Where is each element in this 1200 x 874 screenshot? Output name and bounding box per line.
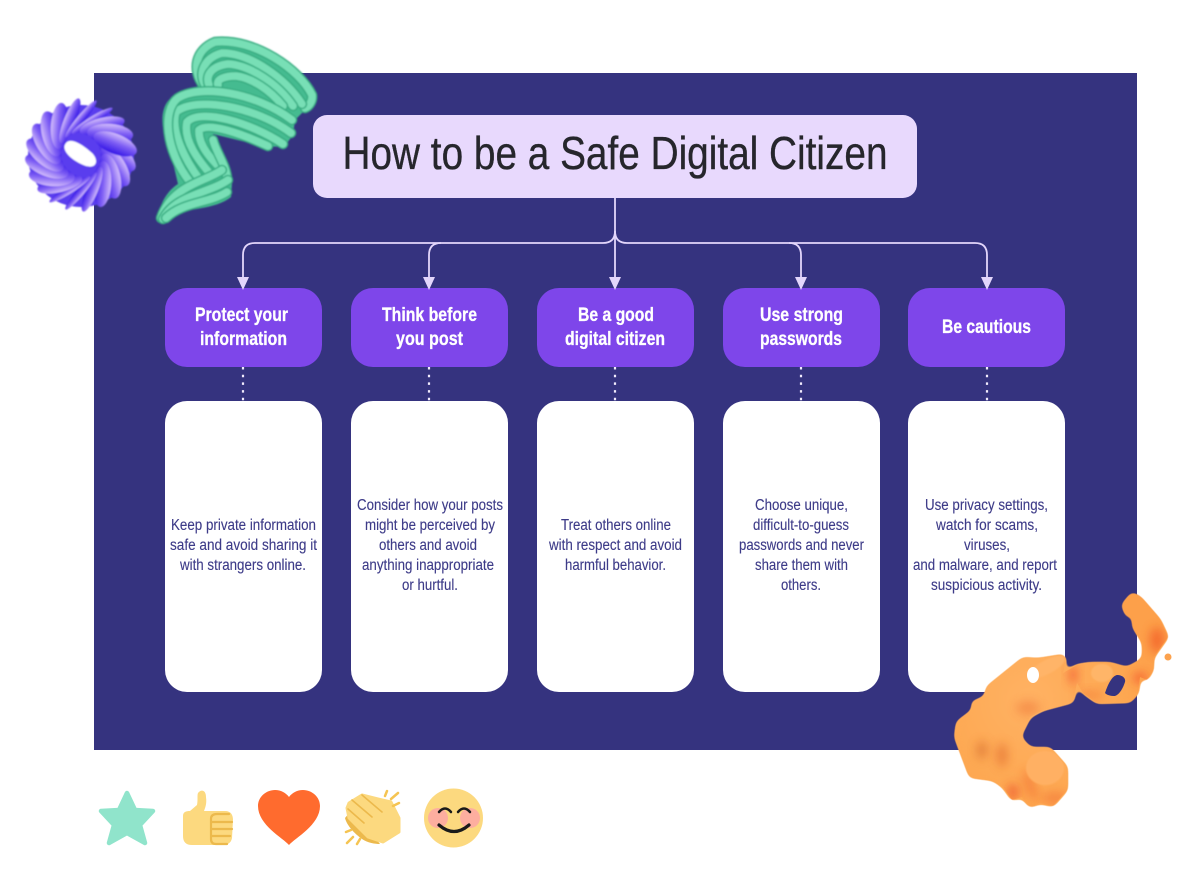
- blob shading: [977, 627, 1164, 803]
- heading: protect your information: information: [200, 329, 287, 350]
- text: think before you post: or hurtful.: [402, 577, 458, 594]
- panel: protect your information: [165, 288, 322, 692]
- text: think before you post: Consider how your posts: [357, 497, 503, 514]
- text: think before you post: anything inappropriate: [362, 557, 494, 574]
- text: be cautious: suspicious activity.: [931, 577, 1042, 594]
- panel: be a good digital citizen: [537, 288, 694, 692]
- decorative 3D purple ring: [21, 96, 141, 214]
- background panel: [94, 73, 1137, 750]
- text: use strong passwords: share them with: [755, 557, 848, 574]
- heading: be a good digital citizen: Be a good: [578, 305, 654, 326]
- text: use strong passwords: others.: [781, 577, 821, 594]
- text: think before you post: others and avoid: [379, 537, 477, 554]
- reaction icons row: [101, 788, 483, 848]
- heading: protect your information: [195, 305, 288, 350]
- text: think before you post: might be perceived by: [365, 517, 495, 534]
- title box: [313, 115, 917, 198]
- panel: think before you post: [351, 288, 508, 692]
- icon: heart: [258, 790, 320, 845]
- icon: clapping hands: [345, 791, 399, 844]
- icon: smiling face: [424, 788, 483, 848]
- decorative 3D green swirl: [159, 38, 314, 224]
- text: be a good digital citizen: Treat others online: [561, 517, 671, 534]
- text: be cautious: viruses,: [964, 537, 1010, 554]
- connector arrows: [237, 198, 993, 290]
- text: protect your information: safe and avoid sharing it: [170, 537, 318, 554]
- text: be a good digital citizen: harmful behavior.: [565, 557, 666, 574]
- text: protect your information: Keep private information: [171, 517, 316, 534]
- heading: be cautious: Be cautious: [942, 317, 1031, 338]
- text: use strong passwords: passwords and never: [739, 537, 864, 554]
- icon: thumbs up: [183, 791, 233, 845]
- text: use strong passwords: Choose unique,: [755, 497, 848, 514]
- text: use strong passwords: [739, 497, 864, 594]
- text: protect your information: [170, 517, 318, 574]
- heading: think before you post: you post: [396, 329, 464, 350]
- text: be cautious: watch for scams,: [935, 517, 1038, 534]
- heading: be a good digital citizen: digital citizen: [565, 329, 665, 350]
- heading: use strong passwords: passwords: [760, 329, 842, 350]
- panel: be cautious: [908, 288, 1065, 692]
- text: use strong passwords: difficult-to-guess: [753, 517, 849, 534]
- blob holes: [1027, 667, 1125, 696]
- heading: use strong passwords: [760, 305, 843, 350]
- heading: think before you post: Think before: [382, 305, 477, 326]
- text: be cautious: and malware, and report: [913, 557, 1058, 574]
- text: be a good digital citizen: [548, 517, 682, 574]
- decorative 3D orange blob: [955, 593, 1172, 807]
- heading: use strong passwords: Use strong: [760, 305, 843, 326]
- text: be cautious: Use privacy settings,: [925, 497, 1048, 514]
- text: think before you post: [357, 497, 503, 594]
- text: protect your information: with strangers online.: [179, 557, 306, 574]
- panel: use strong passwords: [723, 288, 880, 692]
- heading: protect your information: Protect your: [195, 305, 288, 326]
- heading: think before you post: [382, 305, 477, 350]
- text: be a good digital citizen: with respect and avoid: [548, 537, 682, 554]
- title: How to be a Safe Digital Citizen: [342, 127, 888, 179]
- text: be cautious: [913, 497, 1058, 594]
- heading: be a good digital citizen: [565, 305, 665, 350]
- icon: star: [101, 793, 153, 843]
